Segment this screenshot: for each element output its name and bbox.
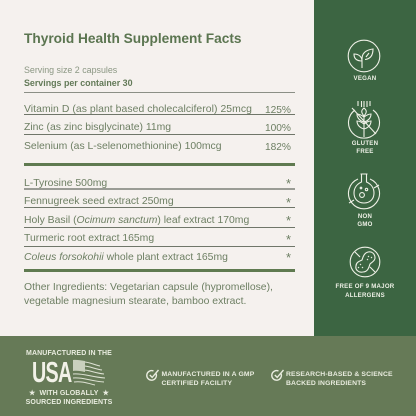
label: non GMO: NON (358, 212, 372, 220)
panel: supplement facts (0, 0, 314, 336)
label: vegan: VEGAN (354, 75, 376, 82)
text: GMP certified (162, 371, 254, 387)
other ingredients: Other Ingredients: Vegetarian capsule (hypromellose), (24, 282, 273, 292)
serving size: Serving size 2 capsules (24, 65, 117, 75)
value: vitamin D: 125% (265, 104, 291, 116)
other ingredients (24, 282, 273, 306)
label: non GMO: GMO (357, 221, 373, 228)
row: fennugreek: Fennugreek seed extract 250mg (24, 196, 174, 206)
value: selenium: 182% (265, 142, 291, 152)
label: gluten free: GLUTEN (352, 140, 378, 146)
text: with globally sourced ingredients: SOURCED INGREDIENTS (26, 398, 112, 406)
icon: allergen free peanut (350, 246, 380, 278)
row: L-tyrosine: L-Tyrosine 500mg (24, 178, 107, 188)
asterisk: turmeric: * (286, 232, 291, 246)
text: GMP certified: CERTIFIED FACILITY (162, 380, 232, 387)
row: holy basil: Holy Basil (Ocimum sanctum) leaf extract 170mg (24, 214, 249, 226)
text: manufactured in the: MANUFACTURED IN THE (26, 350, 112, 357)
panel: footer band (0, 336, 416, 416)
text: research-based (286, 371, 393, 387)
text: research-based: BACKED INGREDIENTS (286, 380, 366, 387)
asterisk: fennugreek: * (286, 194, 291, 210)
text: research-based: RESEARCH-BASED & SCIENCE (286, 371, 393, 378)
row: zinc: Zinc (as zinc bisglycinate) 11mg (24, 122, 171, 132)
icon: check research (271, 370, 284, 381)
text: GMP certified: MANUFACTURED IN A GMP (162, 371, 254, 378)
label: free of 9 major allergens (336, 283, 394, 299)
row: turmeric: Turmeric root extract 165mg (24, 232, 154, 244)
icon: gluten free wheat (348, 101, 380, 139)
row: coleus: Coleus forsokohii whole plant extract 165mg (24, 252, 228, 262)
asterisk: L-tyrosine: * (286, 176, 291, 190)
label: free of 9 major allergens: ALLERGENS (345, 292, 385, 299)
icon: american flag (73, 360, 105, 386)
text: with globally sourced ingredients: ★ WITH GLOBALLY ★ (29, 390, 109, 396)
panel: attributes sidebar (314, 0, 416, 336)
value: zinc: 100% (265, 122, 291, 134)
row: vitamin D: Vitamin D (as plant based cholecalciferol) 25mcg (24, 104, 252, 114)
other ingredients: vegetable magnesium stearate, bamboo extract. (24, 296, 246, 306)
servings per container: Servings per container 30 (24, 78, 133, 88)
label: gluten free: FREE (356, 148, 374, 155)
icon: vegan leaf (348, 40, 380, 72)
asterisk: coleus: * (286, 250, 291, 264)
row: selenium: Selenium (as L-selenomethionine) 100mcg (24, 140, 222, 152)
label: non GMO (357, 212, 373, 228)
icon: check GMP (146, 370, 159, 381)
text: with globally sourced ingredients (26, 390, 112, 406)
icon: non GMO flask (348, 174, 380, 210)
text: USA: USA (32, 357, 72, 389)
title: Thyroid Health Supplement Facts (24, 31, 242, 46)
label: gluten free (352, 140, 378, 155)
asterisk: holy basil: * (286, 212, 291, 228)
label: free of 9 major allergens: FREE OF 9 MAJOR (336, 283, 394, 290)
